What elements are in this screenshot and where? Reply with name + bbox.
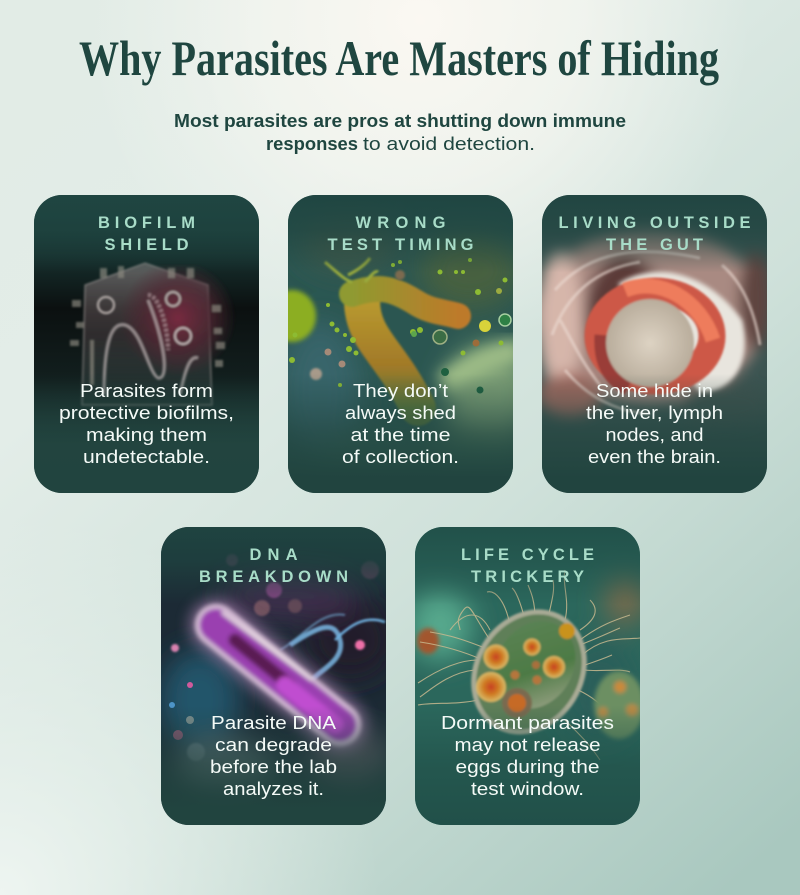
text: biofilm shield: undetectable. xyxy=(83,447,210,467)
panel: life cycle trickery xyxy=(408,527,645,825)
heading: wrong test timing: WRONG xyxy=(356,214,446,232)
text: living outside the gut: the liver, lymph xyxy=(586,403,723,423)
heading: wrong test timing xyxy=(328,214,474,254)
subtitle xyxy=(174,111,626,154)
heading: dna breakdown: BREAKDOWN xyxy=(199,568,348,586)
subtitle: responses xyxy=(266,134,358,154)
text: life cycle trickery: Dormant parasites xyxy=(441,713,614,733)
panel: dna breakdown xyxy=(160,527,395,825)
text: life cycle trickery xyxy=(441,713,614,799)
heading: dna breakdown xyxy=(199,546,348,586)
panel: wrong test timing xyxy=(288,195,513,493)
image: green-orange worm with particles xyxy=(288,195,513,493)
heading: biofilm shield: SHIELD xyxy=(104,236,189,254)
heading: life cycle trickery: LIFE CYCLE xyxy=(461,546,594,564)
image: biofilm shield with bacteria xyxy=(34,195,259,493)
heading: living outside the gut xyxy=(558,214,750,254)
text: wrong test timing: at the time xyxy=(350,425,450,445)
text: living outside the gut: Some hide in xyxy=(596,381,713,401)
text: life cycle trickery: may not release xyxy=(454,735,600,755)
text: dna breakdown: can degrade xyxy=(215,735,332,755)
heading: wrong test timing: TEST TIMING xyxy=(328,236,474,254)
text: biofilm shield: protective biofilms, xyxy=(59,403,234,423)
image: red ring worm in tissue xyxy=(535,195,771,493)
heading: living outside the gut: LIVING OUTSIDE xyxy=(558,214,750,232)
heading: living outside the gut: THE GUT xyxy=(606,236,703,254)
text: wrong test timing: always shed xyxy=(345,403,456,423)
text: living outside the gut xyxy=(586,381,723,467)
subtitle: Most parasites are pros at shutting down immune xyxy=(174,111,626,131)
text: biofilm shield xyxy=(59,381,234,467)
heading: biofilm shield: BIOFILM xyxy=(98,214,195,232)
text: biofilm shield: making them xyxy=(86,425,207,445)
image: green parasite with orange eggs xyxy=(408,527,645,825)
heading: biofilm shield xyxy=(98,214,195,254)
heading: life cycle trickery: TRICKERY xyxy=(471,568,584,586)
text: dna breakdown: analyzes it. xyxy=(223,779,324,799)
text: life cycle trickery: test window. xyxy=(471,779,584,799)
image: magenta bacillus with blue strands xyxy=(160,527,395,825)
text: dna breakdown: Parasite DNA xyxy=(211,713,336,733)
text: living outside the gut: nodes, and xyxy=(606,425,704,445)
text: wrong test timing: They don’t xyxy=(353,381,448,401)
text: life cycle trickery: eggs during the xyxy=(456,757,600,777)
text: dna breakdown xyxy=(210,713,337,799)
text: biofilm shield: Parasites form xyxy=(80,381,213,401)
text: living outside the gut: even the brain. xyxy=(588,447,721,467)
subtitle: to avoid detection. xyxy=(363,134,535,154)
heading: dna breakdown: DNA xyxy=(250,546,298,564)
heading: life cycle trickery xyxy=(461,546,594,586)
text: wrong test timing: of collection. xyxy=(342,447,459,467)
panel: biofilm shield xyxy=(34,195,259,493)
text: dna breakdown: before the lab xyxy=(210,757,337,777)
text: wrong test timing xyxy=(342,381,459,467)
panel: living outside the gut xyxy=(535,195,771,493)
